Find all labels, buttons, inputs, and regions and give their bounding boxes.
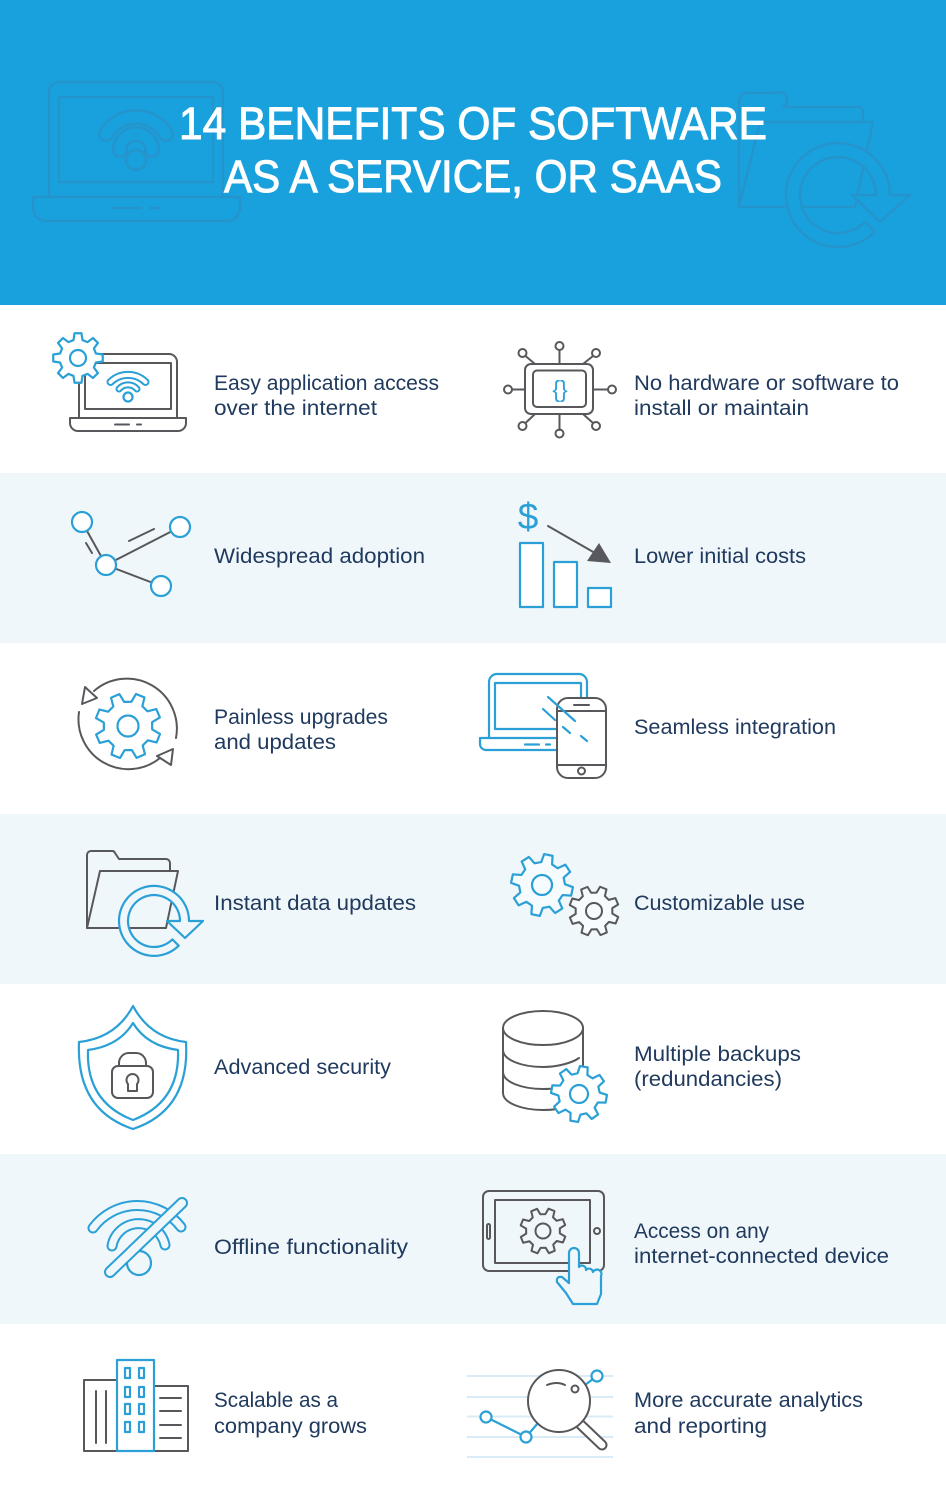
- icon: office buildings: [84, 1360, 188, 1451]
- panel: row 2 background: [0, 473, 946, 643]
- text: more accurate analytics: More accurate analytics: [634, 1388, 863, 1412]
- text: easy application access: Easy application access: [214, 371, 439, 395]
- text: multiple backups: Multiple backups: [634, 1042, 801, 1066]
- title: [179, 98, 767, 202]
- icon: two gears: [506, 849, 626, 943]
- text: access on any: Access on any: [634, 1219, 769, 1243]
- text: advanced security: Advanced security: [214, 1055, 391, 1079]
- icon: network nodes: [72, 512, 190, 596]
- text: no hardware or software: No hardware or software to: [634, 371, 899, 395]
- text: offline functionality: Offline functionality: [214, 1235, 408, 1259]
- text: internet-connected device: internet-connected device: [634, 1244, 889, 1268]
- text: instant data updates: Instant data updates: [214, 891, 416, 915]
- text: painless upgrades: Painless upgrades: [214, 705, 388, 729]
- icon: ghost folder with refresh: [739, 92, 910, 247]
- header panel: [0, 0, 946, 305]
- text: seamless integration: Seamless integration: [634, 715, 836, 739]
- icon: ghost laptop with wifi: [33, 82, 240, 221]
- icon: chip with connectors: [504, 342, 616, 438]
- icon: laptop with wifi and gear: [53, 333, 186, 431]
- text: scalable as a: Scalable as a: [214, 1388, 338, 1412]
- icon: folder with refresh arrow: [87, 851, 203, 956]
- text: and reporting: and reporting: [634, 1414, 767, 1438]
- text: company grows: company grows: [214, 1414, 367, 1438]
- text: lower initial costs: Lower initial costs: [634, 544, 806, 568]
- text: customizable use: Customizable use: [634, 891, 805, 915]
- text: over the internet: over the internet: [214, 396, 377, 420]
- icon: laptop and phone: [480, 674, 606, 778]
- icon: magnifier over line chart: [467, 1370, 613, 1457]
- icon: chip with connectors: {}: [552, 376, 568, 402]
- icon: database with gear: [503, 1011, 611, 1126]
- text: redundancies: (redundancies): [634, 1067, 782, 1091]
- icon: gear with circular arrows: [78, 679, 177, 769]
- title: AS A SERVICE, OR SAAS: [224, 151, 722, 202]
- icon: shield with lock: [79, 1006, 186, 1129]
- panel: row 6 background: [0, 1154, 946, 1324]
- text: and updates: and updates: [214, 730, 336, 754]
- title: 14 BENEFITS OF SOFTWARE: [179, 98, 767, 149]
- text: widespread adoption: Widespread adoption: [214, 544, 425, 568]
- panel: row 4 background: [0, 814, 946, 984]
- icon: crossed-out wifi: [93, 1203, 182, 1275]
- icon: falling cost bars: [518, 496, 611, 607]
- text: install or maintain: install or maintain: [634, 396, 809, 420]
- icon: falling cost bars: $: [518, 496, 538, 537]
- icon: tablet with gear and hand: [483, 1191, 604, 1304]
